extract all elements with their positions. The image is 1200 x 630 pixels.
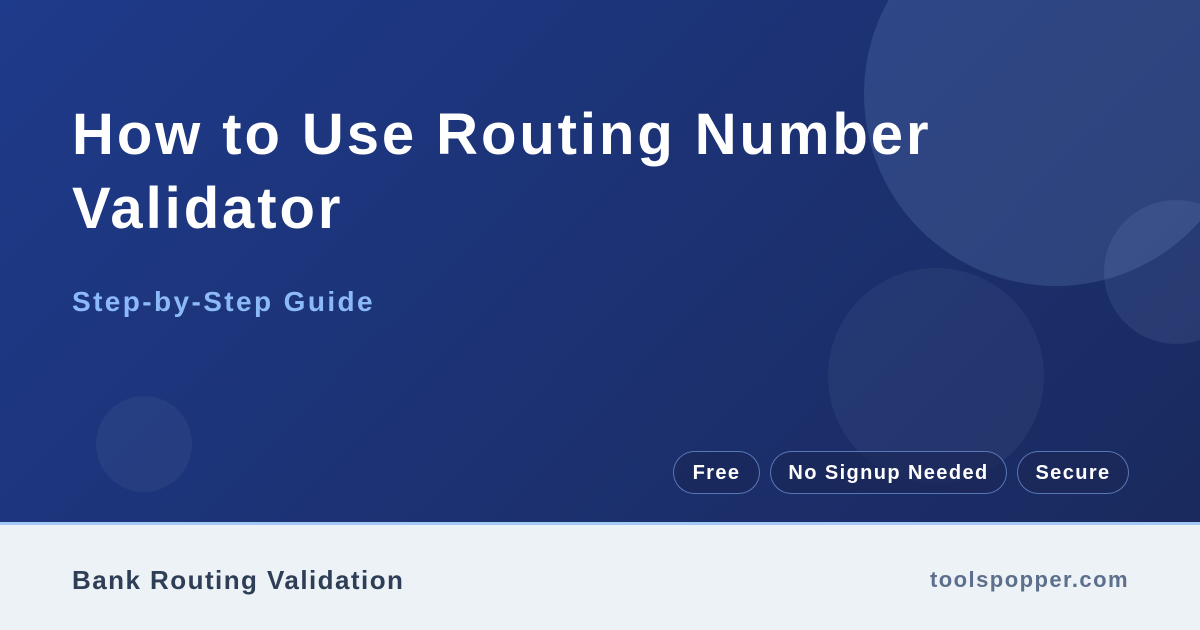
decorative circle: center right — [828, 268, 1044, 484]
title: How to Use Routing Number — [72, 102, 931, 167]
title — [72, 102, 931, 241]
footer domain: toolspopper.com — [930, 567, 1129, 592]
decorative circle: right edge — [1104, 200, 1200, 344]
accent line — [0, 522, 1200, 525]
footer bar — [0, 525, 1200, 630]
badge: Free — [673, 451, 760, 494]
decorative circle: bottom left — [96, 396, 192, 492]
badge: Free: Free — [693, 462, 740, 484]
title: Validator — [72, 176, 343, 241]
badge: No Signup Needed — [770, 451, 1007, 494]
footer label: Bank Routing Validation — [72, 565, 404, 595]
badge: Secure — [1017, 451, 1129, 494]
subtitle: Step-by-Step Guide — [72, 286, 375, 317]
badge: Secure: Secure — [1035, 462, 1111, 484]
badge: No Signup Needed: No Signup Needed — [788, 462, 989, 484]
decorative circle: large top right — [864, 0, 1200, 286]
